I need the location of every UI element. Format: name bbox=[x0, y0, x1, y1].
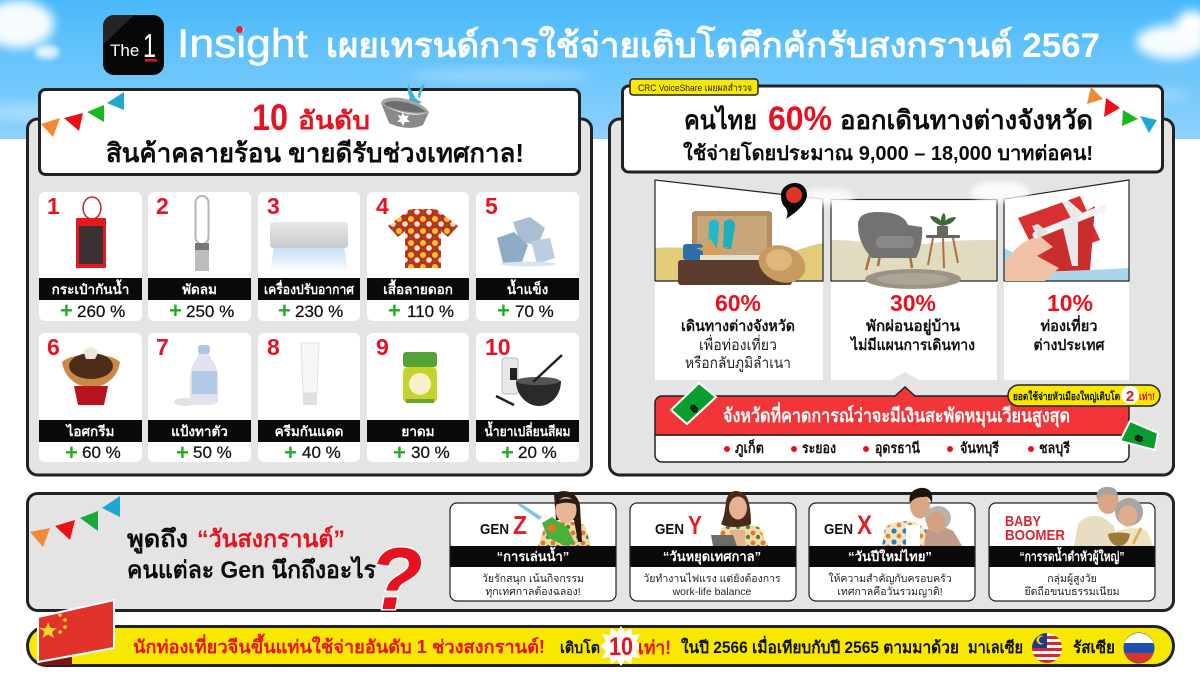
card: rank 9 balm: + bbox=[393, 440, 406, 465]
callout: city spending bbox=[1008, 385, 1160, 406]
card: rank 6 ice cream: 60 % bbox=[82, 443, 121, 462]
card: Gen Z: วัยรักสนุก เน้นกิจกรรม bbox=[482, 573, 584, 585]
card: rank 8 sunscreen: 8 bbox=[267, 334, 280, 360]
card: Baby Boomer: BABY bbox=[1005, 513, 1041, 530]
card: 60% travel: หรือกลับภูมิลำเนา bbox=[685, 355, 791, 372]
card: rank 1 waterproof bag bbox=[39, 192, 142, 323]
card: Gen X: เทศกาลคือวันรวมญาติ! bbox=[837, 585, 943, 598]
card: Gen Z: Z bbox=[513, 510, 527, 540]
heading: songkran by generation: พูดถึง bbox=[127, 526, 188, 554]
card: Baby Boomer: กลุ่มผู้สูงวัย bbox=[1047, 573, 1097, 585]
person: Gen Z girl with water gun bbox=[518, 491, 591, 546]
title: เผยเทรนด์การใช้จ่ายเติบโตคึกคักรับสงกรานต์ 2567 bbox=[326, 25, 1100, 65]
card: rank 1 waterproof bag: 1 bbox=[47, 193, 60, 219]
card: rank 8 sunscreen: + bbox=[284, 440, 297, 465]
icon: water bowl bbox=[381, 84, 429, 128]
card: rank 9 balm bbox=[367, 333, 469, 465]
card: Gen Y bbox=[630, 491, 796, 601]
callout: 10 times: เท่า! bbox=[638, 638, 671, 659]
card: Baby Boomer: ยึดถือขนบธรรมเนียม bbox=[1024, 585, 1120, 598]
panel: top 10 products bbox=[28, 84, 592, 475]
card: rank 2 fan: 250 % bbox=[186, 302, 234, 321]
card: rank 10 hair dye: 10 bbox=[485, 334, 511, 360]
logo: The 1: The bbox=[110, 41, 139, 60]
card: rank 7 baby powder: 7 bbox=[156, 334, 169, 360]
icon: banknote left bbox=[671, 383, 716, 424]
card: rank 5 ice: + bbox=[497, 298, 510, 323]
card: rank 9 balm: 9 bbox=[376, 334, 389, 360]
card: rank 1 waterproof bag: 260 % bbox=[77, 302, 125, 321]
icon: Malaysia flag bbox=[1032, 633, 1062, 663]
callout: city spending: 2 bbox=[1126, 388, 1134, 405]
card: rank 8 sunscreen: 40 % bbox=[302, 443, 341, 462]
card: rank 5 ice: น้ำแข็ง bbox=[507, 279, 548, 297]
illustration: suitcase bbox=[655, 180, 823, 289]
panel: top provinces: อุดรธานี bbox=[875, 440, 920, 457]
illustration: armchair bbox=[831, 200, 997, 289]
card: rank 10 hair dye: น้ำยาเปลี่ยนสีผม bbox=[484, 421, 570, 439]
heading box: top 10 bbox=[40, 90, 580, 174]
icon: map pin bbox=[781, 183, 807, 219]
panel: top provinces: จังหวัดที่คาดการณ์ว่าจะมีเงินสะพัดหมุนเวียนสูงสุด bbox=[723, 402, 1070, 428]
card: 60% travel bbox=[655, 180, 823, 380]
card: rank 2 fan: + bbox=[169, 298, 182, 323]
callout: 10 times bbox=[600, 626, 671, 666]
panel: top provinces: ชลบุรี bbox=[1039, 440, 1070, 457]
icon: China flag bbox=[38, 600, 114, 665]
card: 30% stay home bbox=[831, 199, 997, 380]
card: Baby Boomer bbox=[989, 487, 1155, 601]
panel: top provinces: ระยอง bbox=[802, 441, 836, 457]
panel: generations bbox=[28, 487, 1174, 628]
bunting left bbox=[41, 92, 124, 137]
heading box: top 10: สินค้าคลายร้อน ขายดีรับช่วงเทศกาล! bbox=[106, 138, 524, 168]
card: 30% stay home: ไม่มีแผนการเดินทาง bbox=[849, 335, 975, 354]
card: rank 9 balm: 30 % bbox=[411, 443, 450, 462]
card: rank 1 waterproof bag: + bbox=[60, 298, 73, 323]
person: Gen Y woman with laptop bbox=[711, 491, 768, 546]
card: 30% stay home: พักผ่อนอยู่บ้าน bbox=[866, 318, 961, 336]
people: man and grandmother bbox=[882, 488, 962, 546]
panel: top provinces bbox=[655, 387, 1129, 462]
card: Gen X: ให้ความสำคัญกับครอบครัว bbox=[828, 572, 952, 585]
card: rank 10 hair dye: 20 % bbox=[518, 443, 557, 462]
card: rank 10 hair dye bbox=[476, 333, 579, 465]
card: rank 6 ice cream: + bbox=[65, 440, 78, 465]
heading: songkran by generation: คนแต่ละ Gen นึกถึงอะไร bbox=[127, 555, 376, 584]
people: elderly couple bbox=[1074, 487, 1153, 546]
card: 60% travel: 60% bbox=[715, 290, 761, 316]
card: rank 3 air conditioner: 230 % bbox=[295, 302, 343, 321]
card: rank 5 ice: 5 bbox=[485, 193, 498, 219]
card: rank 6 ice cream bbox=[39, 333, 142, 465]
callout: 10 times: 10 bbox=[609, 633, 633, 661]
card: Gen X: X bbox=[857, 510, 872, 540]
panel: travel survey bbox=[610, 79, 1174, 475]
card: Gen X bbox=[809, 488, 975, 601]
card: rank 4 floral shirt: 110 % bbox=[407, 302, 454, 321]
card: Gen X: GEN bbox=[824, 521, 853, 538]
logo: The 1 bbox=[103, 15, 164, 75]
card: rank 7 baby powder bbox=[148, 333, 251, 465]
card: rank 1 waterproof bag: กระเป๋ากันน้ำ bbox=[52, 279, 129, 297]
card: Gen Z: GEN bbox=[480, 521, 509, 538]
card: 30% stay home: 30% bbox=[890, 290, 936, 316]
card: rank 5 ice: 70 % bbox=[515, 302, 554, 321]
card: rank 9 balm: ยาดม bbox=[401, 424, 435, 439]
card: Baby Boomer: BOOMER bbox=[1005, 527, 1065, 544]
panel: top provinces: ภูเก็ต bbox=[735, 438, 764, 457]
banner: Chinese tourists: เติบโต bbox=[560, 638, 600, 657]
heading box: survey: 60% bbox=[768, 100, 832, 138]
card: Gen Z bbox=[450, 491, 616, 601]
card: rank 5 ice bbox=[476, 192, 579, 323]
sky background bbox=[0, 0, 1200, 139]
card: rank 3 air conditioner: เครื่องปรับอากาศ bbox=[264, 279, 354, 297]
card: Gen Z: ทุกเทศกาลต้องฉลอง! bbox=[485, 586, 581, 598]
card: Baby Boomer: “การรดน้ำดำหัวผู้ใหญ่” bbox=[1020, 546, 1124, 565]
banner: Chinese tourists: รัสเซีย bbox=[1073, 638, 1115, 657]
card: rank 2 fan: พัดลม bbox=[182, 282, 217, 297]
heading box: survey bbox=[622, 86, 1162, 172]
card: Gen X: “วันปีใหม่ไทย” bbox=[848, 548, 932, 564]
heading box: survey: คนไทย bbox=[684, 104, 757, 135]
callout: city spending: เท่า! bbox=[1139, 391, 1155, 403]
banner: Chinese tourists: มาเลเซีย bbox=[968, 638, 1023, 657]
heading box: top 10: 10 bbox=[252, 97, 288, 138]
callout: city spending: ยอดใช้จ่ายหัวเมืองใหญ่เติบโต bbox=[1013, 389, 1120, 403]
heading: songkran by generation: “วันสงกรานต์” bbox=[197, 525, 345, 553]
banner: Chinese tourists bbox=[28, 600, 1174, 666]
card: rank 2 fan: 2 bbox=[156, 193, 169, 219]
card: Gen Y: GEN bbox=[655, 521, 684, 538]
card: rank 2 fan bbox=[148, 192, 251, 323]
illustration: passport and plane bbox=[1004, 180, 1129, 281]
card: rank 6 ice cream: 6 bbox=[47, 334, 60, 360]
card: rank 7 baby powder: 50 % bbox=[193, 443, 232, 462]
panel: top provinces: จันทบุรี bbox=[960, 440, 999, 457]
bunting bottom bbox=[30, 496, 120, 547]
card: rank 8 sunscreen: ครีมกันแดด bbox=[275, 424, 343, 439]
card: rank 3 air conditioner bbox=[258, 192, 360, 323]
card: rank 8 sunscreen bbox=[258, 333, 360, 465]
card: 60% travel: เพื่อท่องเที่ยว bbox=[699, 334, 777, 354]
logo: The 1: 1 bbox=[143, 27, 156, 64]
tag: CRC VoiceShare bbox=[630, 79, 758, 95]
card: rank 4 floral shirt bbox=[367, 192, 469, 323]
card: 10% abroad: 10% bbox=[1047, 290, 1093, 316]
banner: Chinese tourists: ในปี 2566 เมื่อเทียบกับปี 2565 ตามมาด้วย bbox=[681, 635, 959, 657]
card: 10% abroad: ต่างประเทศ bbox=[1034, 337, 1105, 354]
heading box: survey: ออกเดินทางต่างจังหวัด bbox=[840, 105, 1093, 135]
card: rank 6 ice cream: ไอศกรีม bbox=[65, 423, 114, 439]
card: 10% abroad bbox=[1004, 180, 1129, 380]
icon: Russia flag bbox=[1124, 632, 1154, 664]
card: Gen Y: work-life balance bbox=[672, 586, 752, 598]
card: rank 7 baby powder: + bbox=[176, 440, 189, 465]
card: rank 3 air conditioner: 3 bbox=[267, 193, 280, 219]
icon: banknote left: ฿ bbox=[688, 402, 702, 416]
bunting right bbox=[1087, 87, 1157, 133]
card: rank 4 floral shirt: 4 bbox=[376, 193, 389, 219]
heading box: survey: ใช้จ่ายโดยประมาณ 9,000 – 18,000 บาทต่อคน! bbox=[683, 141, 1093, 165]
tag: CRC VoiceShare: CRC VoiceShare เผยผลสำรวจ bbox=[638, 83, 752, 94]
card: Gen Y: Y bbox=[688, 510, 702, 540]
banner: Chinese tourists: นักท่องเที่ยวจีนขึ้นแท่นใช้จ่ายอันดับ 1 ช่วงสงกรานต์! bbox=[133, 633, 545, 657]
card: Gen Y: วัยทำงานไฟแรง แต่ยังต้องการ bbox=[643, 572, 781, 585]
clouds over images bbox=[798, 182, 1030, 205]
title: Insight bbox=[177, 22, 308, 66]
card: Gen Z: “การเล่นน้ำ” bbox=[497, 546, 569, 564]
heading: songkran by generation bbox=[127, 525, 376, 584]
card: rank 3 air conditioner: + bbox=[278, 298, 291, 323]
heading box: top 10: อันดับ bbox=[298, 107, 370, 135]
card: rank 4 floral shirt: + bbox=[388, 298, 401, 323]
card: rank 7 baby powder: แป้งทาตัว bbox=[171, 424, 228, 439]
card: rank 4 floral shirt: เสื้อลายดอก bbox=[383, 279, 453, 297]
icon: question mark: ? bbox=[369, 529, 423, 628]
card: 10% abroad: ท่องเที่ยว bbox=[1040, 315, 1098, 335]
icon: banknote right bbox=[1120, 421, 1158, 450]
card: Gen Y: “วันหยุดเทศกาล” bbox=[663, 549, 761, 565]
card: rank 10 hair dye: + bbox=[501, 440, 514, 465]
icon: banknote right: ฿ bbox=[1132, 432, 1147, 445]
card: 60% travel: เดินทางต่างจังหวัด bbox=[681, 317, 795, 335]
